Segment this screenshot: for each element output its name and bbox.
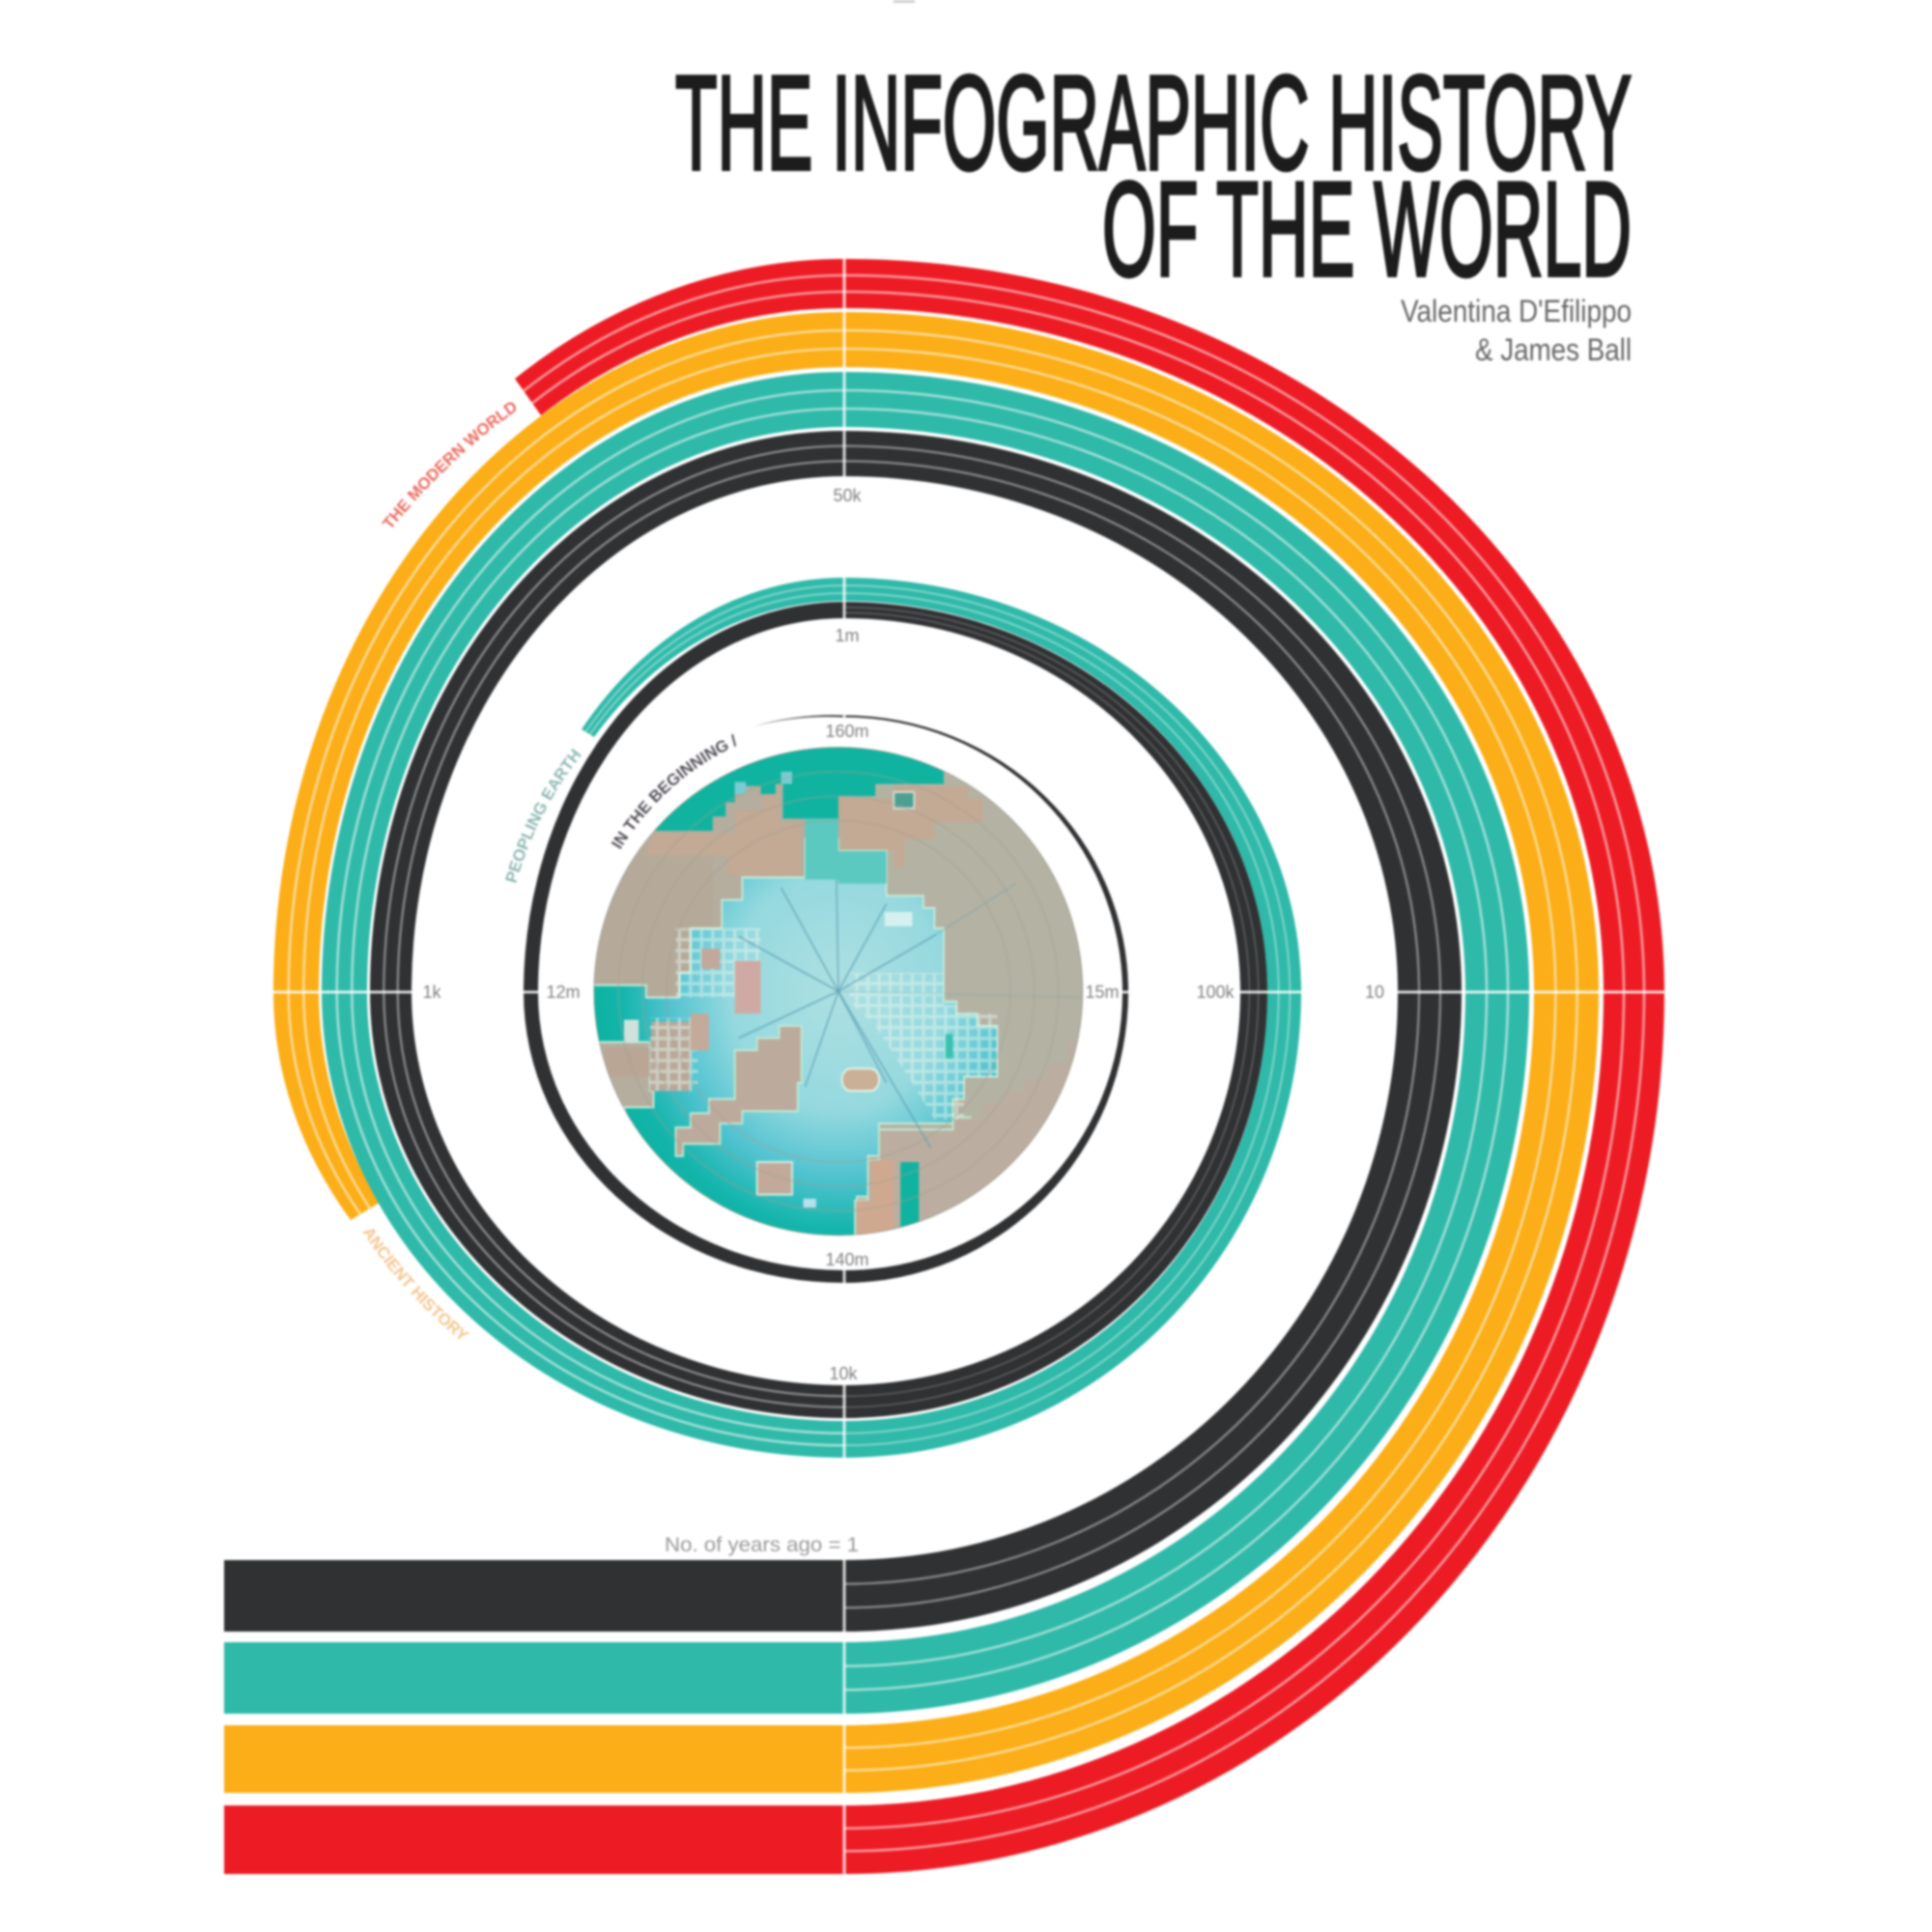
crosshair axis lines bbox=[270, 253, 1671, 1879]
caption: years ago: No. of years ago = 1 bbox=[665, 1534, 859, 1556]
axis labels: 10 bbox=[1365, 982, 1384, 1002]
authors: Valentina D'Efilippo bbox=[1401, 294, 1632, 328]
globe latitude rings bbox=[616, 769, 999, 1213]
axis labels: 1k bbox=[422, 982, 442, 1002]
globe central sea bbox=[590, 838, 997, 1245]
globe rim bbox=[594, 748, 1083, 1236]
globe bottom sea inlet bbox=[900, 1162, 919, 1227]
globe bbox=[592, 746, 1085, 1237]
globe bottom land coast bbox=[855, 1118, 972, 1245]
globe shallow sea channel bbox=[805, 818, 887, 884]
spiral band: peopling earth (teal) bbox=[224, 372, 1529, 1714]
axis labels: 160m bbox=[825, 722, 869, 741]
axis labels: 100k bbox=[1196, 982, 1236, 1002]
globe small islands bbox=[606, 772, 952, 1208]
globe island grid left bbox=[649, 1020, 692, 1093]
title bbox=[675, 48, 1632, 304]
globe upper-left grid bbox=[675, 928, 760, 998]
globe bottom land bbox=[855, 1202, 858, 1235]
top edge mark bbox=[894, 0, 915, 3]
authors: & James Ball bbox=[1475, 332, 1632, 367]
axis labels: 12m bbox=[546, 982, 581, 1002]
globe left grid bbox=[650, 1018, 697, 1091]
spiral band: ancient history (orange) bbox=[224, 312, 1599, 1793]
globe land shading bbox=[647, 786, 981, 875]
axis labels: 140m bbox=[825, 1250, 869, 1269]
globe lower-left land bbox=[675, 1026, 802, 1156]
axis labels: 1m bbox=[835, 626, 860, 645]
spiral band: in the beginning (dark) bbox=[224, 431, 1462, 1632]
label: the modern world: THE MODERN WORLD bbox=[381, 401, 518, 528]
axis labels: 10k bbox=[829, 1364, 859, 1383]
globe top sea bbox=[654, 746, 945, 833]
label: in the beginning: IN THE BEGINNING / bbox=[611, 732, 738, 850]
authors bbox=[1401, 294, 1632, 367]
axis labels: 50k bbox=[833, 486, 863, 505]
axis labels: 15m bbox=[1085, 982, 1120, 1002]
label: peopling earth: PEOPLING EARTH bbox=[504, 748, 582, 884]
globe bottom land pink block bbox=[857, 1160, 894, 1234]
label: ancient history: ANCIENT HISTORY bbox=[361, 1228, 469, 1341]
axis labels bbox=[422, 486, 1384, 1383]
spiral band: the modern world (red) bbox=[224, 259, 1664, 1874]
globe island grid right bbox=[849, 973, 997, 1120]
globe spokes bbox=[739, 879, 1082, 1148]
